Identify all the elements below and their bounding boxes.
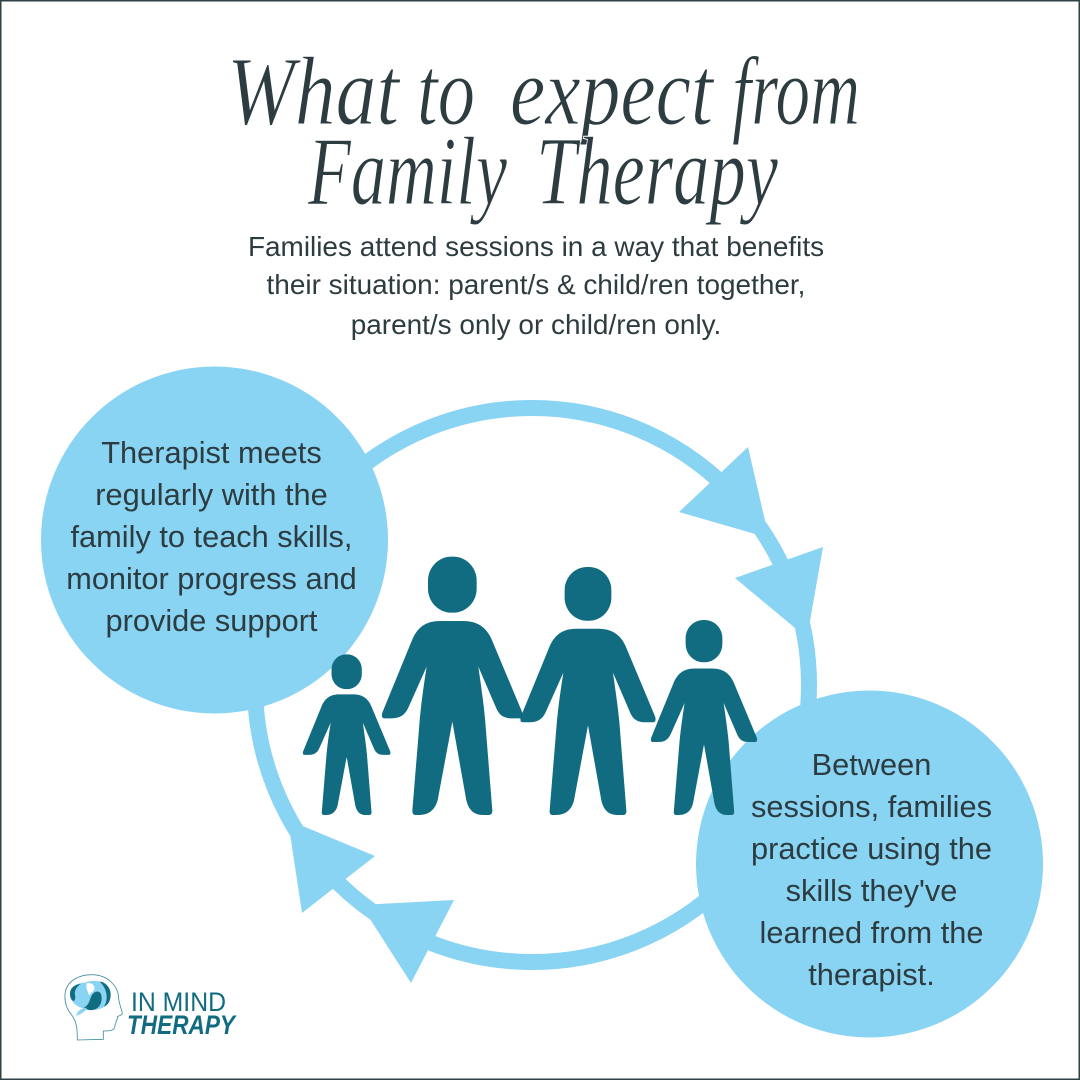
logo: In Mind Therapy: [65, 975, 238, 1040]
arrow: top right first: [679, 447, 769, 538]
intro text: Families attend sessions in a way that benefits: [248, 231, 824, 262]
panel: between sessions circle: [696, 690, 1043, 1038]
text: between sessions circle: learned from the: [760, 915, 983, 950]
text: between sessions circle: sessions, families: [751, 789, 992, 824]
title: from: [732, 38, 860, 146]
text: therapist circle: [66, 435, 357, 638]
text: therapist circle: regularly with the: [95, 477, 328, 512]
intro text: [248, 231, 824, 340]
text: therapist circle: Therapist meets: [101, 435, 322, 470]
icon: older child right: [651, 620, 757, 815]
text: therapist circle: monitor progress and: [66, 561, 357, 596]
title: Therapy: [536, 118, 778, 226]
title: What: [227, 38, 401, 146]
text: between sessions circle: skills they've: [786, 873, 957, 908]
text: between sessions circle: therapist.: [808, 957, 935, 992]
title: to: [417, 38, 475, 146]
icon: small child left: [303, 654, 390, 815]
arrow: bottom left lower: [361, 900, 454, 983]
text: between sessions circle: practice using the: [751, 831, 992, 866]
intro text: parent/s only or child/ren only.: [351, 309, 721, 340]
title: Family: [307, 118, 507, 226]
text: between sessions circle: [751, 747, 992, 992]
logo text: therapy: THERAPY: [127, 1010, 238, 1040]
icon: head with brain: [65, 975, 122, 1040]
text: between sessions circle: Between: [812, 747, 931, 782]
title: [227, 38, 860, 226]
intro text: their situation: parent/s & child/ren together,: [267, 269, 805, 300]
logo text: in mind: IN MIND: [131, 987, 226, 1017]
panel: therapist circle: [41, 366, 388, 714]
arrow: top right second: [735, 547, 823, 638]
icon: second adult: [520, 567, 656, 815]
icon: tall adult: [382, 557, 523, 815]
icon: family of four holding hands: [303, 557, 757, 815]
arrow: bottom left upper: [288, 820, 375, 913]
cycle ring with arrows: [255, 408, 823, 983]
text: therapist circle: family to teach skills,: [71, 519, 352, 554]
title: expect: [510, 38, 715, 146]
text: therapist circle: provide support: [106, 603, 318, 638]
